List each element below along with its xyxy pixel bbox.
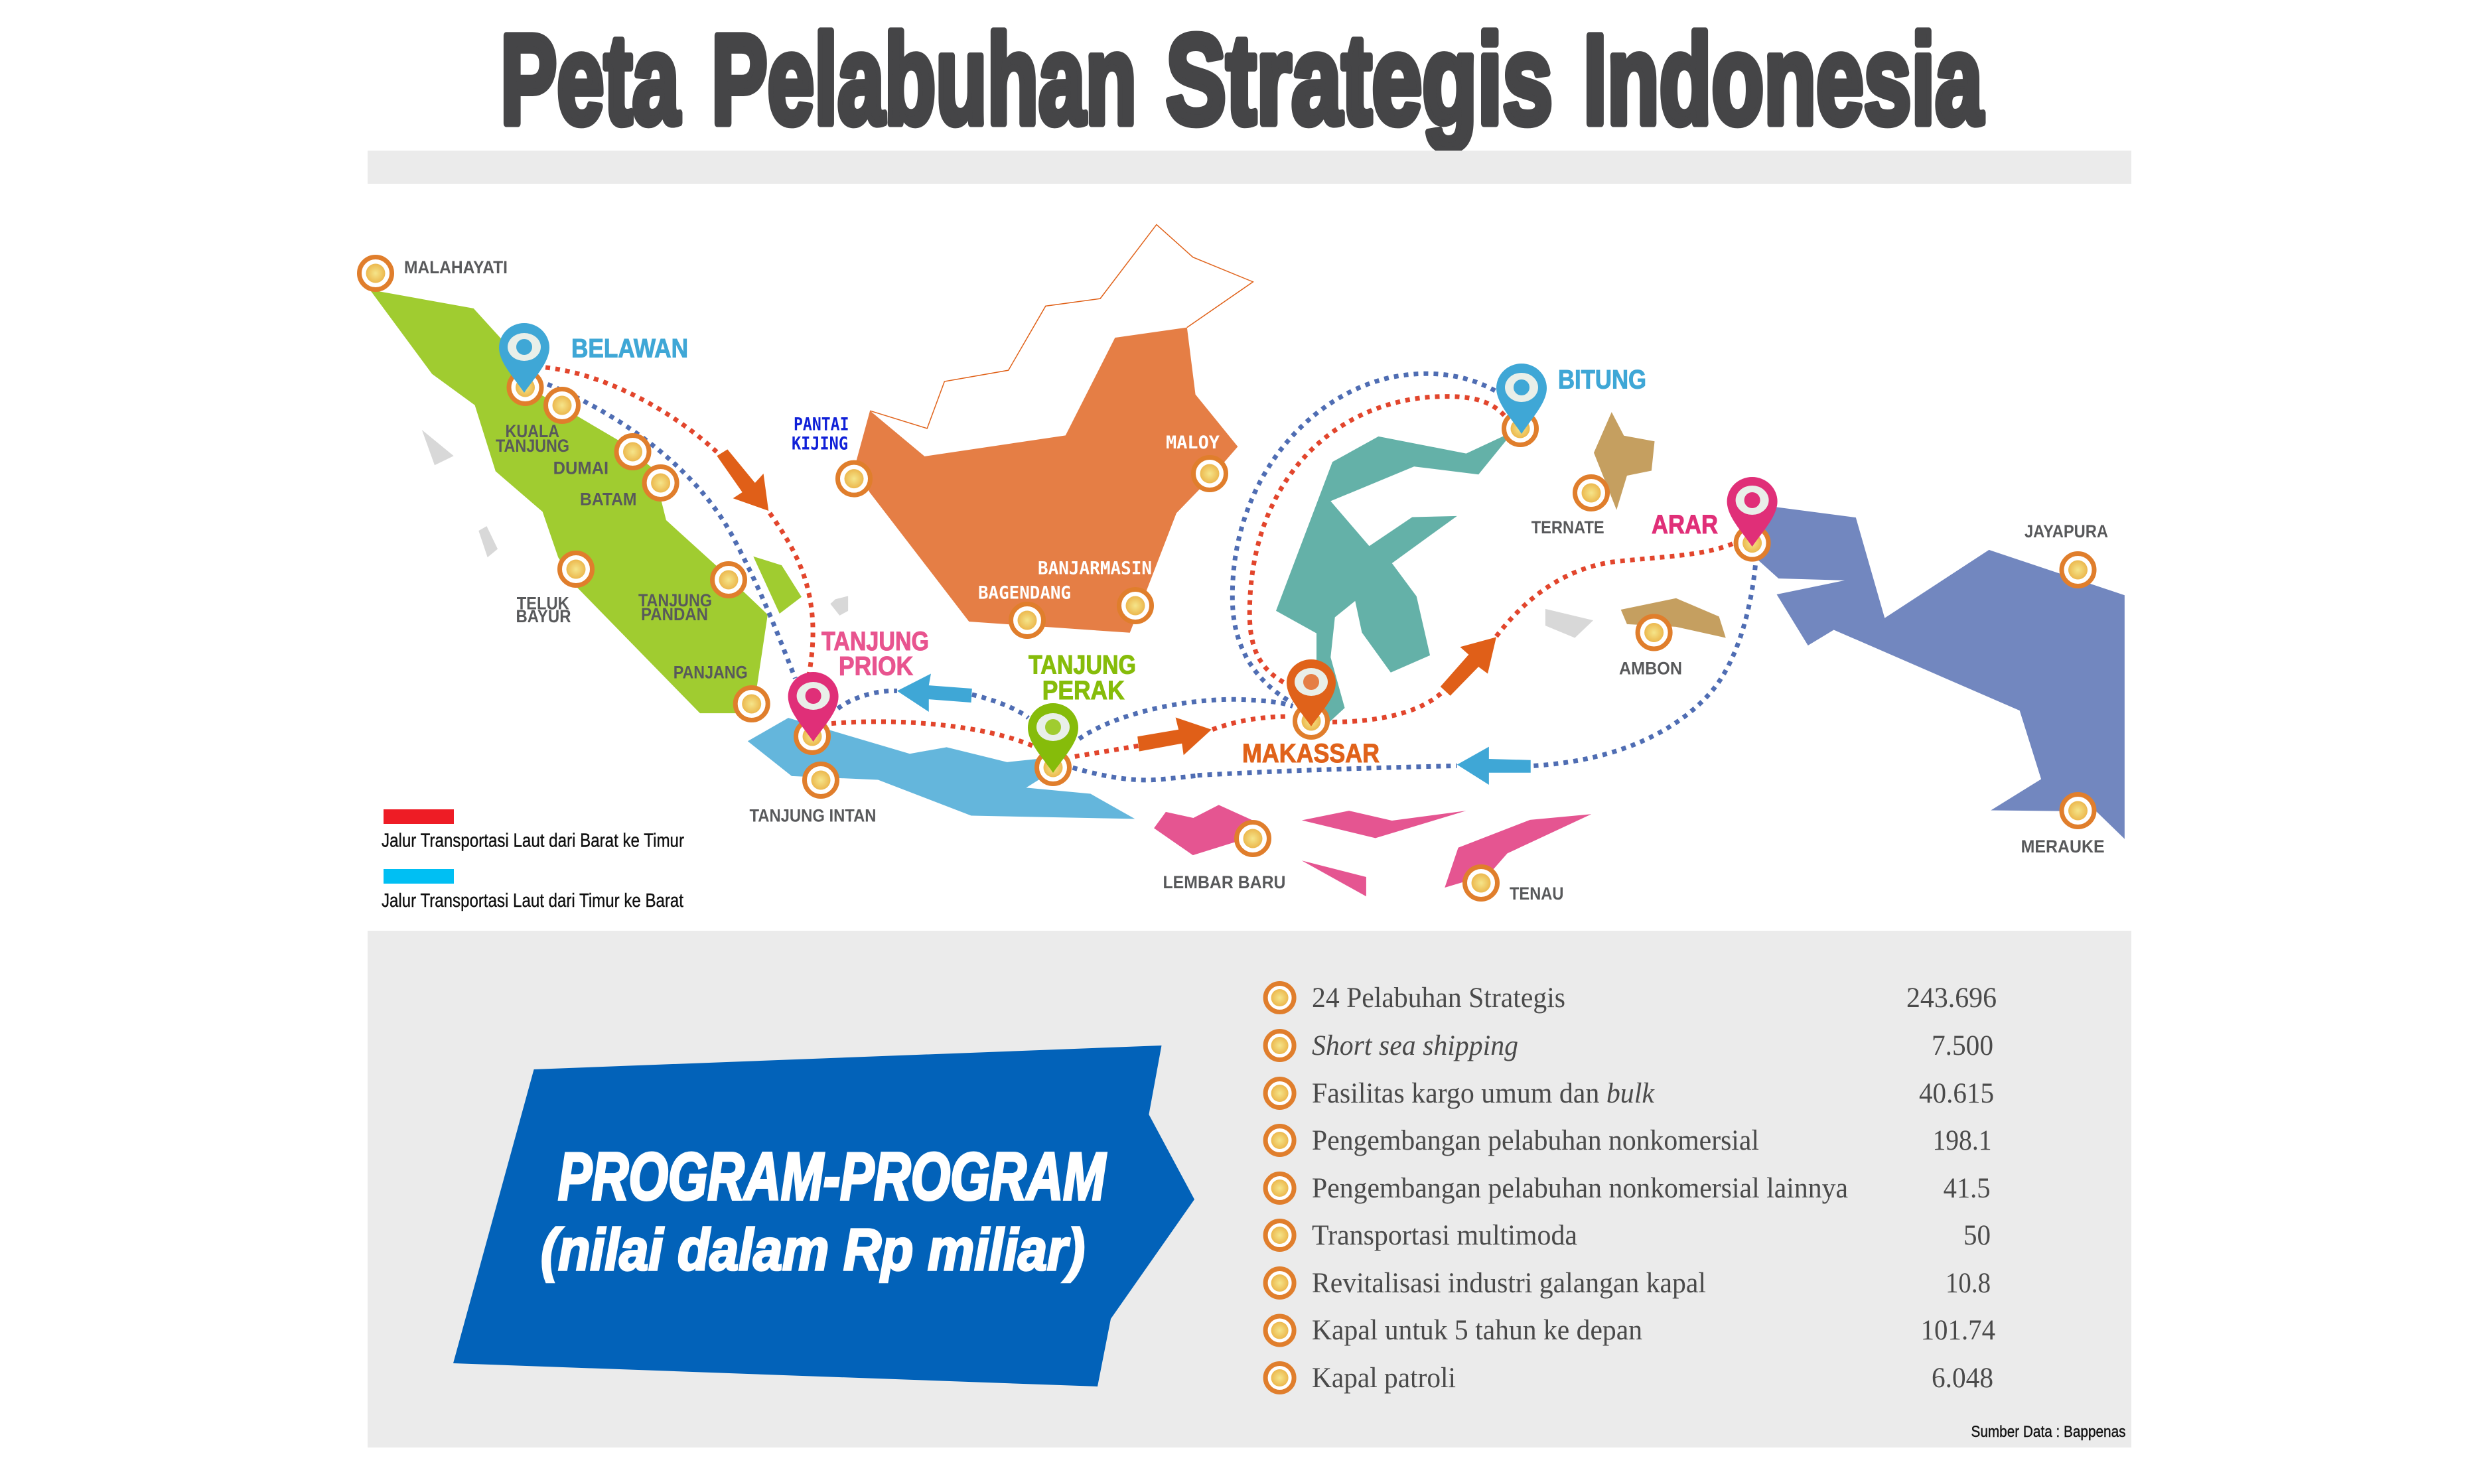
island: Sulawesi xyxy=(1276,431,1514,728)
port labels xyxy=(404,257,2108,904)
pin: Belawan xyxy=(499,323,549,393)
row: Kapal patroli: 6.048 xyxy=(1932,1363,1993,1394)
title: Strategis xyxy=(1166,8,1553,151)
port labels: KIJING xyxy=(792,433,848,454)
row: Fasilitas kargo: 40.615 xyxy=(1919,1078,1994,1109)
label: Tanjung Perak: PERAK xyxy=(1042,676,1125,705)
row: Transportasi multimoda: Transportasi multimoda xyxy=(1312,1220,1577,1251)
panel: programs xyxy=(368,931,2131,1448)
arrow: west-bound Perak to Priok xyxy=(897,674,972,712)
source note: Sumber Data : Bappenas xyxy=(1971,1423,2126,1441)
sea routes east xyxy=(1198,373,1756,776)
label: Tanjung Perak xyxy=(1029,650,1136,705)
port labels: LEMBAR BARU xyxy=(1163,872,1286,892)
title: Peta xyxy=(500,8,680,151)
sea routes centre xyxy=(831,691,1293,780)
label: Arar: ARAR xyxy=(1652,510,1718,539)
port labels: DUMAI xyxy=(553,458,608,478)
row: 24 Pelabuhan Strategis: 24 Pelabuhan Strategis xyxy=(1312,982,1565,1014)
small grey islands west xyxy=(422,430,848,616)
row: Pengembangan pelabuhan nonkomersial: Pengembangan pelabuhan nonkomersial xyxy=(1312,1125,1759,1156)
title: Indonesia xyxy=(1583,8,1983,151)
legend: east to west swatch xyxy=(384,869,454,884)
title xyxy=(500,8,1983,151)
row: Revitalisasi xyxy=(1265,1268,1991,1299)
label: Tanjung Perak: TANJUNG xyxy=(1029,650,1136,679)
port labels: TANJUNG INTAN xyxy=(750,806,876,826)
row: 24 Pelabuhan Strategis xyxy=(1265,982,1997,1014)
map of Indonesia xyxy=(360,225,2125,904)
pin: Bitung xyxy=(1496,364,1547,434)
row: Pengembangan pelabuhan nonkomersial xyxy=(1265,1125,1992,1156)
small grey island east xyxy=(1545,609,1593,638)
port labels: PANJANG xyxy=(674,662,748,682)
port labels: AMBON xyxy=(1619,659,1682,679)
row: Pengembangan pelabuhan nonkomersial: 198.1 xyxy=(1932,1125,1992,1156)
port labels: TENAU xyxy=(1510,884,1563,904)
row: Fasilitas kargo xyxy=(1265,1078,1994,1109)
pin: Makassar xyxy=(1287,659,1336,726)
row: Kapal 5 tahun: 101.74 xyxy=(1921,1315,1995,1346)
label: Makassar: MAKASSAR xyxy=(1242,739,1380,768)
sea routes west xyxy=(545,368,813,679)
row: Transportasi multimoda xyxy=(1265,1220,1991,1251)
legend xyxy=(382,809,684,911)
banner heading: PROGRAM-PROGRAM xyxy=(558,1140,1106,1214)
island: Kalimantan xyxy=(856,328,1238,633)
port markers xyxy=(360,257,2094,900)
port labels: BANJARMASIN xyxy=(1038,558,1152,578)
row: Kapal patroli xyxy=(1265,1363,1993,1394)
row: Transportasi multimoda: 50 xyxy=(1963,1220,1991,1251)
arrow: east-bound Makassar to Arar xyxy=(1441,637,1496,696)
row: Revitalisasi: Revitalisasi industri galangan kapal xyxy=(1312,1268,1706,1299)
row: Kapal 5 tahun: Kapal untuk 5 tahun ke depan xyxy=(1312,1315,1642,1346)
row: Short sea shipping xyxy=(1265,1030,1993,1061)
port labels: PANDAN xyxy=(641,604,708,624)
islands: Maluku xyxy=(1594,412,1726,638)
legend: west to east swatch xyxy=(384,809,454,824)
row: Pengembangan lainnya: Pengembangan pelabuhan nonkomersial lainnya xyxy=(1312,1173,1848,1204)
row: Short sea shipping: Short sea shipping xyxy=(1312,1030,1518,1061)
islands: Nusa Tenggara xyxy=(1302,811,1591,896)
label: Belawan: BELAWAN xyxy=(571,334,688,364)
island: Sumatra xyxy=(370,290,802,713)
row: Fasilitas kargo: Fasilitas kargo umum dan bulk xyxy=(1312,1078,1655,1109)
arrow: east-bound Perak to Makassar xyxy=(1137,717,1212,755)
port labels: MERAUKE xyxy=(2021,837,2105,856)
label: Tanjung Priok: TANJUNG xyxy=(821,627,929,656)
label: Tanjung Priok: PRIOK xyxy=(839,652,913,681)
label: Bitung: BITUNG xyxy=(1558,365,1646,394)
port labels: TELUK xyxy=(517,594,569,614)
row: Short sea shipping: 7.500 xyxy=(1932,1030,1993,1061)
port labels: MALAHAYATI xyxy=(404,257,508,277)
arrow: west-bound Arar to Perak xyxy=(1457,747,1531,785)
title: Pelabuhan xyxy=(711,8,1137,151)
row: Kapal patroli: Kapal patroli xyxy=(1312,1363,1456,1394)
port labels: PANTAI xyxy=(794,415,849,435)
island: Papua xyxy=(1750,507,2125,839)
legend: west to east text: Jalur Transportasi Laut dari Barat ke Timur xyxy=(382,831,684,852)
port labels: BATAM xyxy=(580,490,637,509)
row: Kapal 5 tahun xyxy=(1265,1315,1995,1346)
arrow: east-bound Belawan to Priok xyxy=(717,449,768,511)
port labels: TANJUNG xyxy=(638,590,712,610)
island: Bali and Lombok xyxy=(1154,805,1253,855)
row: Revitalisasi: 10.8 xyxy=(1946,1268,1991,1299)
port labels: BAGENDANG xyxy=(978,583,1071,604)
banner subheading: (nilai dalam Rp miliar) xyxy=(541,1217,1085,1282)
label: Tanjung Priok xyxy=(821,627,929,681)
pin: Arar xyxy=(1727,477,1778,547)
pin: Tanjung Priok xyxy=(788,672,839,742)
port labels: TANJUNG xyxy=(496,436,569,456)
pin: Tanjung Perak xyxy=(1028,703,1078,773)
port labels: JAYAPURA xyxy=(2025,521,2108,541)
banner: programs xyxy=(453,1046,1194,1386)
port labels: MALOY xyxy=(1166,433,1220,453)
port labels: BAYUR xyxy=(516,606,571,626)
port labels: TERNATE xyxy=(1531,517,1604,537)
legend: east to west text: Jalur Transportasi Laut dari Timur ke Barat xyxy=(382,890,683,911)
island: Java xyxy=(748,718,1135,819)
row: 24 Pelabuhan Strategis: 243.696 xyxy=(1906,982,1997,1014)
header strip xyxy=(368,151,2131,184)
island: Kalimantan outline north xyxy=(870,225,1253,429)
port labels: KUALA xyxy=(506,421,559,441)
row: Pengembangan lainnya: 41.5 xyxy=(1944,1173,1991,1204)
programme list xyxy=(1265,982,1997,1394)
